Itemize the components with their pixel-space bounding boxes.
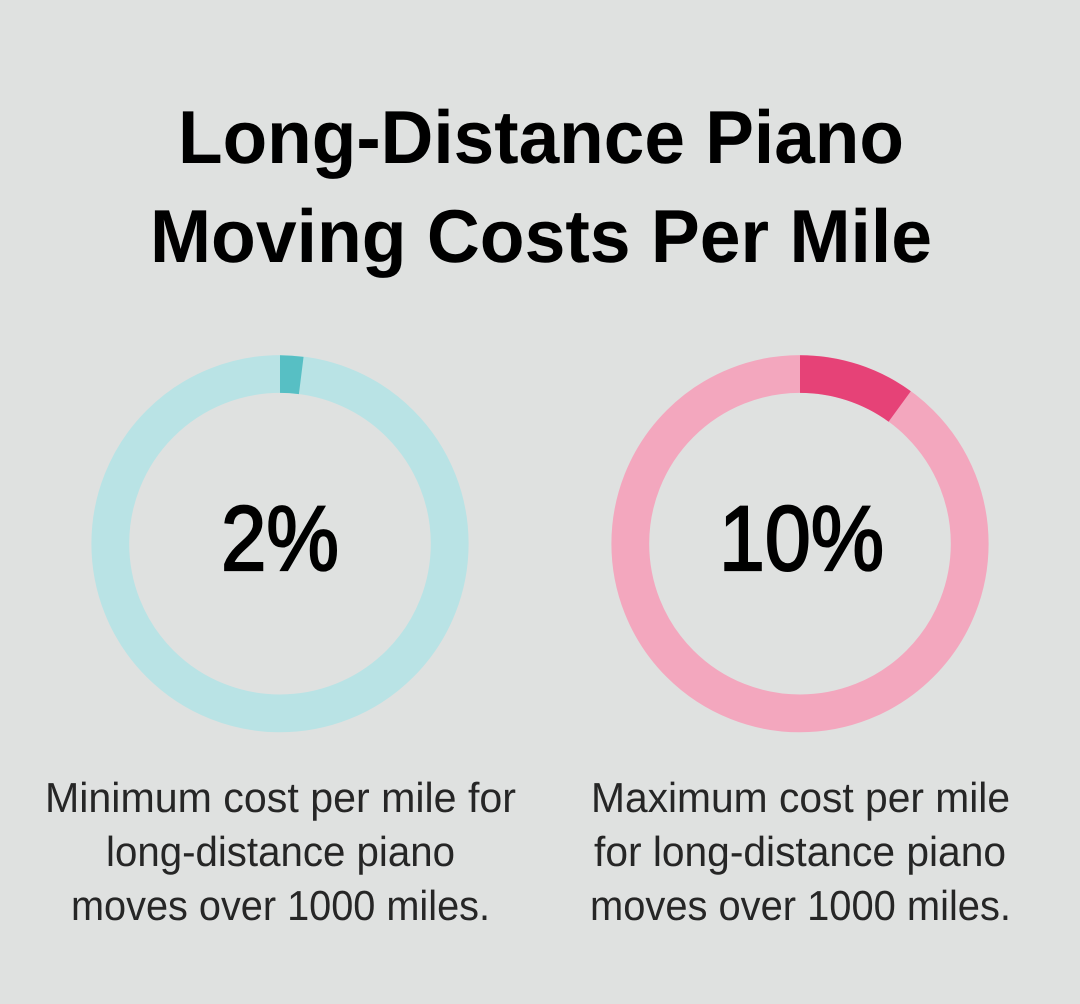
title: Moving Costs Per Mile [150, 194, 932, 278]
description: maximum cost [590, 774, 1011, 929]
panel: minimum cost [45, 355, 516, 929]
description: minimum cost: long-distance piano [106, 828, 455, 875]
donut chart: 2% [110, 355, 450, 713]
description: minimum cost: moves over 1000 miles. [71, 882, 490, 929]
description: maximum cost: for long-distance piano [594, 828, 1006, 875]
description: minimum cost: Minimum cost per mile for [45, 774, 516, 821]
value: 2%: 2% [221, 488, 339, 590]
value: 10%: 10% [719, 488, 884, 590]
description: minimum cost [45, 774, 516, 929]
donut chart: 10% [630, 355, 970, 713]
title: Long-Distance Piano [178, 95, 904, 179]
description: maximum cost: Maximum cost per mile [591, 774, 1010, 821]
panel: maximum cost [590, 355, 1011, 929]
description: maximum cost: moves over 1000 miles. [590, 882, 1011, 929]
title [150, 95, 932, 278]
